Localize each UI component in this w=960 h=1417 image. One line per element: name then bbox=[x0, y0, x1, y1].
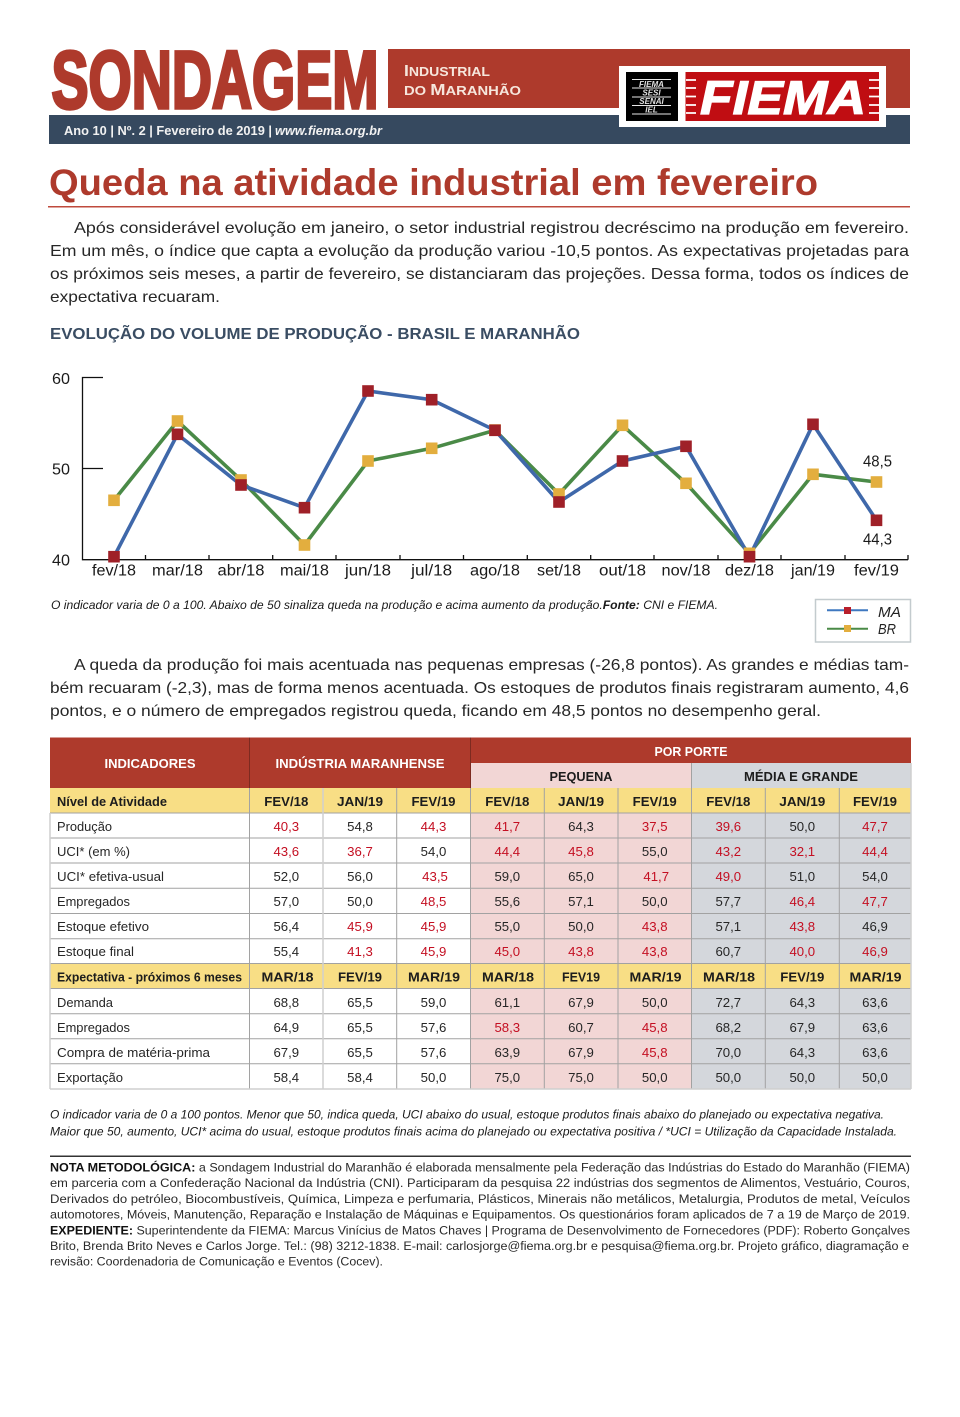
row: UCI efetiva-usual: 43,5 bbox=[422, 869, 448, 884]
row: Compra de matéria-prima: 45,8 bbox=[642, 1045, 668, 1060]
row: Estoque efetivo: 45,9 bbox=[421, 919, 446, 934]
second paragraph: bém recuaram (-2,3), mas de forma menos acentuada. Os estoques de produtos finais registraram aumento, 4,6 bbox=[50, 680, 909, 697]
row: Empregados expectation: 68,2 bbox=[715, 1020, 741, 1035]
row: Compra de matéria-prima: 67,9 bbox=[568, 1045, 594, 1060]
row: Produção: 39,6 bbox=[715, 819, 741, 834]
methodological note and credits: NOTA METODOLÓGICA: a Sondagem Industrial do Maranhão é elaborada mensalmente pela Federação das Indústrias do Estado do Maranhão (FIEMA) bbox=[50, 1160, 910, 1174]
row header: Nível de Atividade: JAN/19 bbox=[779, 794, 825, 809]
row: Produção: 41,7 bbox=[494, 819, 520, 834]
row: Estoque efetivo bbox=[57, 919, 888, 934]
table header: group titles: INDÚSTRIA MARANHENSE bbox=[276, 756, 445, 771]
row: UCI efetiva-usual: 41,7 bbox=[643, 869, 669, 884]
row: Estoque efetivo: 43,8 bbox=[789, 919, 815, 934]
row: Produção: Produção bbox=[57, 819, 112, 834]
row: UCI em %: UCI* (em %) bbox=[57, 844, 130, 859]
row: Compra de matéria-prima: 64,3 bbox=[789, 1045, 815, 1060]
row header: Expectativa: MAR/19 bbox=[408, 970, 460, 985]
row: Compra de matéria-prima: 70,0 bbox=[715, 1045, 741, 1060]
row: Exportação: 50,0 bbox=[862, 1070, 888, 1085]
main headline: Queda na atividade industrial em fevereiro bbox=[49, 162, 818, 203]
row: UCI efetiva-usual: 52,0 bbox=[273, 869, 299, 884]
series markers: BR bbox=[108, 416, 882, 559]
x axis labels: abr/18 bbox=[218, 562, 264, 580]
row: Empregados expectation bbox=[57, 1020, 888, 1035]
row: Compra de matéria-prima: 65,5 bbox=[347, 1045, 373, 1060]
row header: Expectativa: FEV/19 bbox=[780, 970, 824, 985]
row: UCI em %: 43,2 bbox=[715, 844, 741, 859]
row: Empregados expectation: 45,8 bbox=[642, 1020, 668, 1035]
row: Empregados: 50,0 bbox=[347, 894, 373, 909]
row: Estoque efetivo: 45,9 bbox=[347, 919, 373, 934]
row: Demanda bbox=[57, 995, 888, 1010]
row header: Nível de Atividade: FEV/19 bbox=[412, 794, 456, 809]
row: Empregados bbox=[57, 894, 888, 909]
logo: FIEMA: IEL bbox=[645, 106, 658, 114]
table grid bbox=[50, 763, 911, 1089]
y axis labels: 40 bbox=[52, 552, 70, 570]
row: Exportação: Exportação bbox=[57, 1070, 123, 1085]
y axis and x axis bbox=[82, 378, 908, 560]
row: UCI em %: 43,6 bbox=[273, 844, 299, 859]
methodological note and credits: automotores, Móveis, Manutenção, Reparação e Instalação de Máquinas e Equipamentos. Os questionários foram aplicados de 7 a 19 de Março de 2019. bbox=[50, 1208, 910, 1222]
methodological note and credits bbox=[50, 1160, 910, 1268]
chart source note: O indicador varia de 0 a 100. Abaixo de 50 sinaliza queda na produção e acima aumento da produção. Fonte: CNI e FIEMA. bbox=[51, 598, 718, 612]
row: Compra de matéria-prima: 67,9 bbox=[273, 1045, 299, 1060]
logo: FIEMA: SENAI bbox=[639, 97, 664, 106]
row header: Nível de Atividade: JAN/19 bbox=[558, 794, 604, 809]
row: Exportação: 75,0 bbox=[568, 1070, 594, 1085]
row: UCI em %: 45,8 bbox=[568, 844, 594, 859]
indicators table bbox=[50, 738, 911, 1089]
logo: FIEMA: FIEMA bbox=[639, 80, 664, 89]
row: Exportação: 58,4 bbox=[273, 1070, 299, 1085]
row: Produção: 37,5 bbox=[642, 819, 668, 834]
row: Estoque efetivo: 43,8 bbox=[642, 919, 668, 934]
row: Estoque final: Estoque final bbox=[57, 944, 134, 959]
intro paragraph: Em um mês, o índice que capta a evolução da produção variou -10,5 pontos. As expectativas projetadas para bbox=[50, 243, 909, 260]
y axis labels: 60 bbox=[52, 371, 70, 388]
banner subtitle: INDUSTRIAL bbox=[404, 63, 490, 80]
x axis labels: ago/18 bbox=[470, 562, 520, 580]
row: Produção: 54,8 bbox=[347, 819, 373, 834]
x axis labels: dez/18 bbox=[725, 562, 774, 580]
logo: FIEMA bbox=[619, 66, 886, 127]
row: Demanda: 67,9 bbox=[568, 995, 594, 1010]
row: Estoque final: 45,9 bbox=[421, 944, 446, 959]
methodological note and credits: revisão: Coordenadoria de Comunicação e Eventos (Cocev). bbox=[50, 1254, 383, 1268]
table header: group titles: INDICADORES bbox=[104, 756, 196, 771]
row: UCI efetiva-usual: 49,0 bbox=[715, 869, 741, 884]
row: Demanda: Demanda bbox=[57, 995, 114, 1010]
row: Estoque efetivo: 55,0 bbox=[494, 919, 520, 934]
row header: Nível de Atividade: FEV/19 bbox=[633, 794, 677, 809]
navy edition bar bbox=[49, 115, 910, 144]
row: Exportação: 75,0 bbox=[494, 1070, 520, 1085]
line chart: production volume bbox=[52, 371, 908, 580]
x axis labels: jan/19 bbox=[790, 562, 835, 580]
row: Exportação: 50,0 bbox=[715, 1070, 741, 1085]
row header: Expectativa: MAR/18 bbox=[703, 970, 755, 985]
methodological note and credits: Derivados do petróleo, Biocombustíveis, Química, Limpeza e perfumaria, Plásticos, Minerais não metálicos, Metalurgia, Produtos de metal, Veículos bbox=[50, 1192, 910, 1206]
row: Demanda: 63,6 bbox=[862, 995, 888, 1010]
row: Estoque final: 60,7 bbox=[715, 944, 741, 959]
x axis labels bbox=[92, 562, 899, 580]
y axis labels: 50 bbox=[52, 462, 70, 478]
row header: Expectativa: Expectativa - próximos 6 meses bbox=[57, 970, 242, 985]
row: UCI efetiva-usual bbox=[57, 869, 888, 884]
chart legend: MA bbox=[878, 604, 901, 621]
row: Empregados expectation: 63,6 bbox=[862, 1020, 888, 1035]
second paragraph: A queda da produção foi mais acentuada nas pequenas empresas (-26,8 pontos). As grandes e médias tam- bbox=[74, 657, 909, 674]
row: UCI efetiva-usual: 51,0 bbox=[789, 869, 815, 884]
row: Estoque final: 43,8 bbox=[642, 944, 668, 959]
row header: Nível de Atividade: JAN/19 bbox=[337, 794, 383, 809]
row: Produção: 44,3 bbox=[421, 819, 446, 834]
row: Estoque final bbox=[57, 944, 888, 959]
row: Estoque efetivo: 46,9 bbox=[862, 919, 888, 934]
row: Produção: 40,3 bbox=[273, 819, 299, 834]
row: Compra de matéria-prima: 63,6 bbox=[862, 1045, 888, 1060]
table footnote bbox=[50, 1108, 897, 1138]
row header: Nível de Atividade: FEV/18 bbox=[485, 794, 529, 809]
row: Empregados expectation: Empregados bbox=[57, 1020, 130, 1035]
series line: MA bbox=[114, 391, 876, 557]
row: UCI efetiva-usual: 54,0 bbox=[862, 869, 888, 884]
row: Exportação: 50,0 bbox=[789, 1070, 815, 1085]
row: Exportação: 50,0 bbox=[421, 1070, 446, 1085]
methodological note and credits: EXPEDIENTE: Superintendente da FIEMA: Marcus Vinícius de Matos Chaves | Programa de Desenvolvimento de Fornecedores (PDF): Roberto Gonçalves bbox=[50, 1224, 910, 1238]
row header: Nível de Atividade: FEV/18 bbox=[264, 794, 308, 809]
table header: group titles: POR PORTE bbox=[654, 744, 728, 759]
row: Estoque final: 40,0 bbox=[789, 944, 815, 959]
row: Estoque efetivo: 57,1 bbox=[715, 919, 741, 934]
row: Estoque efetivo: 56,4 bbox=[273, 919, 299, 934]
row: UCI em %: 54,0 bbox=[421, 844, 446, 859]
row: Empregados expectation: 65,5 bbox=[347, 1020, 373, 1035]
table header: group titles bbox=[104, 744, 858, 784]
second paragraph bbox=[50, 657, 909, 720]
row: Compra de matéria-prima bbox=[57, 1045, 888, 1060]
row: Empregados: 55,6 bbox=[494, 894, 520, 909]
row: UCI em %: 32,1 bbox=[789, 844, 815, 859]
x axis labels: mai/18 bbox=[280, 562, 329, 580]
x axis labels: fev/19 bbox=[854, 562, 899, 580]
row header: Expectativa: FEV19 bbox=[562, 970, 600, 985]
row: Exportação bbox=[57, 1070, 888, 1085]
row: UCI em %: 55,0 bbox=[642, 844, 668, 859]
row header: Nível de Atividade: FEV/19 bbox=[853, 794, 897, 809]
row: UCI em % bbox=[57, 844, 888, 859]
row: Compra de matéria-prima: Compra de matéria-prima bbox=[57, 1045, 211, 1060]
methodological note and credits: em parceria com a Confederação Nacional da Indústria (CNI). Participaram da pesquisa 22 indústrias dos segmentos de Alimentos, Vestuário, Couros, bbox=[50, 1176, 910, 1190]
row: Demanda: 64,3 bbox=[789, 995, 815, 1010]
intro paragraph: os próximos seis meses, a partir de fevereiro, se distanciaram das projeções. Dessa forma, todos os índices de bbox=[50, 266, 909, 283]
row: Estoque final: 45,0 bbox=[494, 944, 520, 959]
row: Estoque final: 41,3 bbox=[347, 944, 373, 959]
row: Demanda: 72,7 bbox=[715, 995, 741, 1010]
value label MA: 44,3 bbox=[863, 532, 892, 548]
row: Empregados expectation: 64,9 bbox=[273, 1020, 299, 1035]
row: UCI efetiva-usual: 56,0 bbox=[347, 869, 373, 884]
logo: FIEMA: FIEMA bbox=[700, 71, 866, 124]
row: Compra de matéria-prima: 63,9 bbox=[494, 1045, 520, 1060]
table header: group titles: MÉDIA E GRANDE bbox=[744, 769, 858, 784]
intro paragraph: Após considerável evolução em janeiro, o setor industrial registrou decréscimo na produção em fevereiro. bbox=[74, 220, 909, 237]
row: Empregados expectation: 57,6 bbox=[421, 1020, 446, 1035]
row: Produção: 64,3 bbox=[568, 819, 594, 834]
series markers: MA bbox=[108, 386, 882, 562]
row: Empregados: 46,4 bbox=[789, 894, 815, 909]
x axis labels: jul/18 bbox=[410, 562, 452, 580]
row: UCI em %: 44,4 bbox=[862, 844, 888, 859]
series line: BR bbox=[114, 421, 876, 553]
row: Empregados: 57,0 bbox=[273, 894, 299, 909]
row: Demanda: 68,8 bbox=[273, 995, 299, 1010]
row: UCI efetiva-usual: UCI* efetiva-usual bbox=[57, 869, 164, 884]
website: www.fiema.org.br bbox=[275, 124, 383, 138]
row: Produção: 47,7 bbox=[862, 819, 888, 834]
edition text: Ano 10 | Nº. 2 | Fevereiro de 2019 | bbox=[64, 124, 272, 138]
row: Empregados expectation: 58,3 bbox=[494, 1020, 520, 1035]
table header: group titles: PEQUENA bbox=[550, 769, 613, 784]
table footnote: Maior que 50, aumento, UCI* acima do usual, estoque produtos finais acima do planejado ou expectativa positiva / *UCI = Utilização da Capacidade Instalada. bbox=[50, 1124, 897, 1138]
x axis labels: mar/18 bbox=[152, 562, 203, 580]
intro paragraph: expectativa recuaram. bbox=[50, 289, 220, 306]
row: Empregados expectation: 60,7 bbox=[568, 1020, 594, 1035]
row: Demanda: 50,0 bbox=[642, 995, 668, 1010]
table footnote: O indicador varia de 0 a 100 pontos. Menor que 50, indica queda, UCI abaixo do usual, estoque produtos finais abaixo do planejado ou expectativa negativa. bbox=[50, 1108, 884, 1122]
row: Produção: 50,0 bbox=[789, 819, 815, 834]
header masthead bbox=[49, 35, 910, 144]
row: Estoque final: 46,9 bbox=[862, 944, 888, 959]
red banner bbox=[388, 49, 910, 108]
masthead title: SONDAGEM: SONDAGEM bbox=[52, 35, 378, 126]
row: Empregados: 57,7 bbox=[715, 894, 741, 909]
row: Exportação: 58,4 bbox=[347, 1070, 373, 1085]
row header: Expectativa: MAR/19 bbox=[850, 970, 902, 985]
x axis labels: nov/18 bbox=[662, 562, 710, 580]
x axis labels: out/18 bbox=[599, 562, 646, 580]
row: Estoque efetivo: Estoque efetivo bbox=[57, 919, 149, 934]
row: Empregados: 57,1 bbox=[568, 894, 594, 909]
logo: FIEMA: SESI bbox=[642, 88, 661, 98]
chart legend: BR bbox=[878, 621, 896, 638]
table backgrounds bbox=[50, 738, 911, 1089]
x axis labels: fev/18 bbox=[92, 562, 136, 580]
row: Empregados: 50,0 bbox=[642, 894, 668, 909]
row: Compra de matéria-prima: 57,6 bbox=[421, 1045, 446, 1060]
row: Empregados expectation: 67,9 bbox=[789, 1020, 815, 1035]
row header: Nível de Atividade: FEV/18 bbox=[706, 794, 750, 809]
row header: Expectativa bbox=[57, 970, 902, 985]
row: UCI efetiva-usual: 65,0 bbox=[568, 869, 594, 884]
row: UCI em %: 44,4 bbox=[494, 844, 520, 859]
x axis labels: set/18 bbox=[537, 562, 581, 580]
x axis labels: jun/18 bbox=[344, 562, 391, 580]
chart legend bbox=[816, 600, 910, 642]
chart heading: EVOLUÇÃO DO VOLUME DE PRODUÇÃO - BRASIL E MARANHÃO bbox=[50, 325, 580, 343]
row: Produção bbox=[57, 819, 888, 834]
row header: Nível de Atividade bbox=[57, 794, 897, 809]
row: Empregados: 47,7 bbox=[862, 894, 888, 909]
value label BR: 48,5 bbox=[863, 454, 892, 470]
row: Empregados: Empregados bbox=[57, 894, 130, 909]
row: Exportação: 50,0 bbox=[642, 1070, 668, 1085]
row: Demanda: 65,5 bbox=[347, 995, 373, 1010]
row: Demanda: 59,0 bbox=[421, 995, 446, 1010]
row header: Nível de Atividade: Nível de Atividade bbox=[57, 794, 167, 809]
row: Estoque efetivo: 50,0 bbox=[568, 919, 594, 934]
intro paragraph bbox=[50, 220, 909, 306]
row: Estoque final: 55,4 bbox=[273, 944, 299, 959]
row: UCI em %: 36,7 bbox=[347, 844, 373, 859]
row header: Expectativa: MAR/18 bbox=[262, 970, 314, 985]
second paragraph: pontos, e o número de empregados registrou queda, ficando em 48,5 pontos no desempenho geral. bbox=[50, 703, 821, 720]
row: Demanda: 61,1 bbox=[494, 995, 520, 1010]
row: Empregados: 48,5 bbox=[421, 894, 446, 909]
row header: Expectativa: MAR/19 bbox=[630, 970, 682, 985]
methodological note and credits: Brito, Brenda Brito Neves e Carlos Jorge. Tel.: (98) 3212-1838. E-mail: carlosjorge@fiema.org.br e pesquisa@fiema.org.br. Projeto gráfico, diagramação e bbox=[50, 1239, 909, 1253]
row header: Expectativa: FEV/19 bbox=[338, 970, 382, 985]
row: UCI efetiva-usual: 59,0 bbox=[494, 869, 520, 884]
y axis labels bbox=[52, 371, 70, 570]
banner subtitle line 2: DO MARANHÃO bbox=[404, 82, 521, 99]
row: Estoque final: 43,8 bbox=[568, 944, 594, 959]
row header: Expectativa: MAR/18 bbox=[482, 970, 534, 985]
